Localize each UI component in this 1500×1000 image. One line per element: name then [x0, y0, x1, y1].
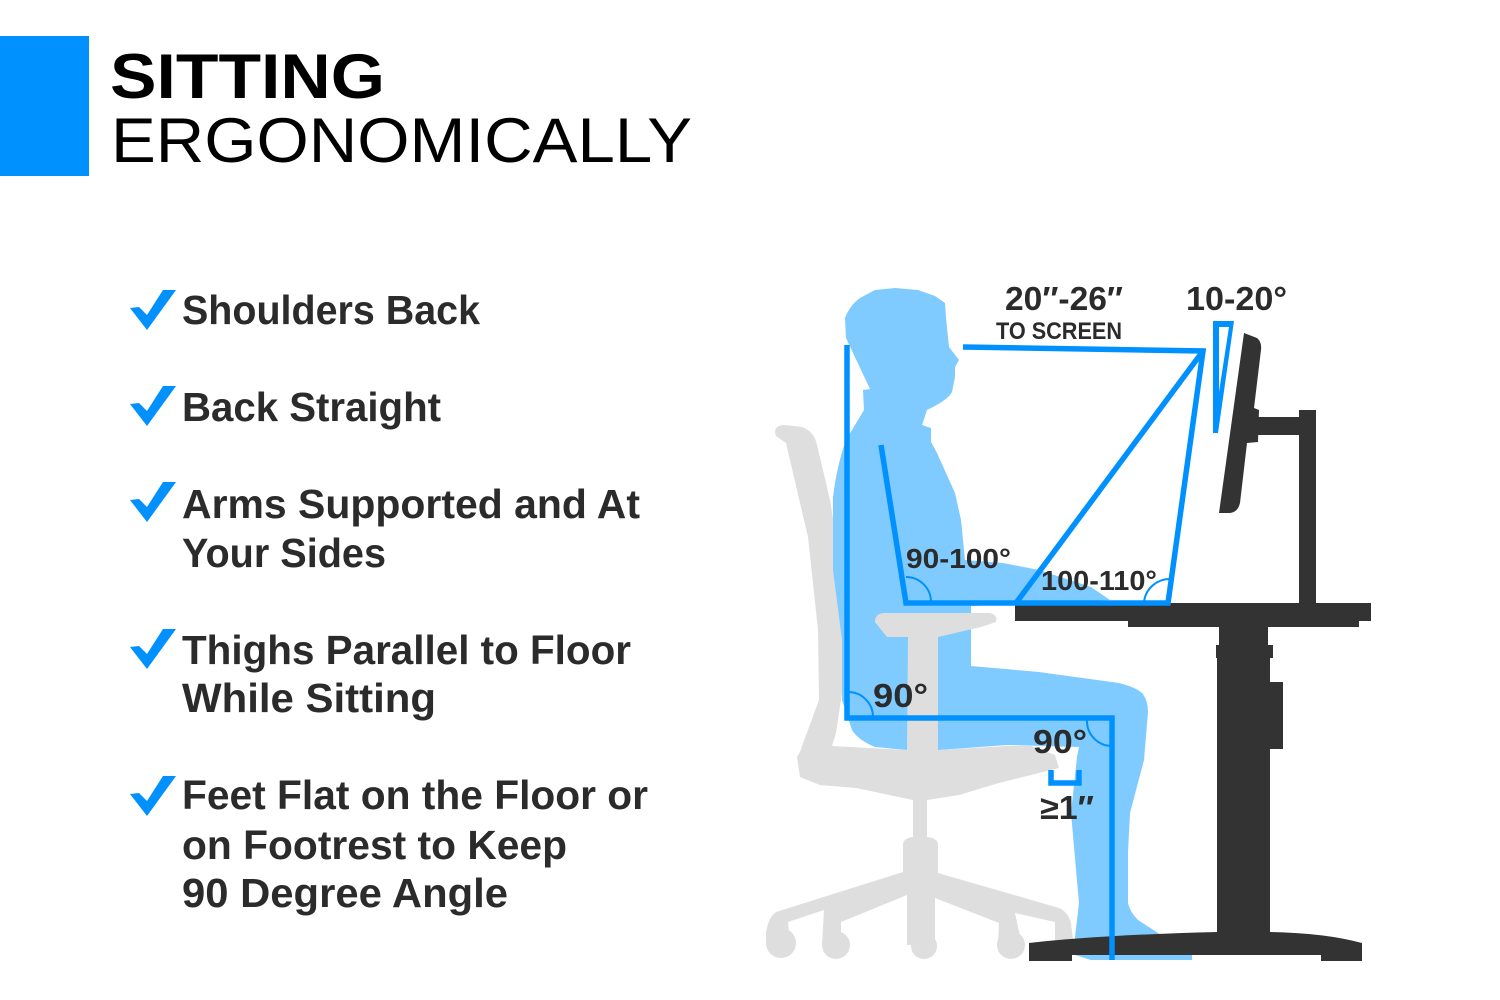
monitor arm	[1250, 410, 1316, 603]
chair back	[775, 425, 844, 760]
label: screen tilt: 10-20°	[1186, 280, 1287, 317]
chair seat and armrest	[797, 613, 1059, 800]
posture guide lines	[847, 345, 1203, 960]
item: feet flat: Feet Flat on the Floor or	[182, 772, 648, 818]
chair casters	[766, 928, 1025, 959]
person silhouette	[833, 288, 1192, 960]
chair base	[766, 798, 1073, 945]
item: arms supported: Arms Supported and At	[182, 481, 640, 527]
title	[110, 42, 692, 176]
item: feet flat: on Footrest to Keep	[182, 822, 567, 868]
item: feet flat	[130, 772, 648, 916]
title: ERGONOMICALLY	[111, 106, 692, 176]
label: viewing distance: TO SCREEN	[996, 318, 1122, 345]
item: back straight: Back Straight	[182, 384, 441, 430]
item: thighs parallel: Thighs Parallel to Floor	[182, 627, 631, 673]
header accent block	[0, 36, 89, 176]
title: SITTING	[110, 42, 385, 112]
label: seat clearance: ≥1″	[1040, 789, 1094, 826]
ergonomic diagram	[766, 280, 1371, 961]
label: viewing distance	[996, 280, 1123, 345]
label: knee angle: 90°	[1033, 723, 1087, 760]
label: viewing distance: 20″-26″	[1005, 280, 1123, 317]
item: arms supported: Your Sides	[182, 530, 386, 576]
screen tilt wedge	[1213, 321, 1234, 433]
item: thighs parallel	[130, 627, 631, 721]
monitor	[1219, 333, 1261, 513]
desk	[1015, 603, 1371, 961]
label: wrist angle: 100-110°	[1041, 565, 1157, 596]
label: elbow angle: 90-100°	[906, 543, 1011, 574]
item: thighs parallel: While Sitting	[182, 675, 436, 721]
angle arcs	[849, 577, 1171, 746]
item: feet flat: 90 Degree Angle	[182, 870, 508, 916]
checklist	[130, 287, 648, 916]
label: hip angle: 90°	[873, 677, 928, 714]
item: arms supported	[130, 481, 640, 576]
item: shoulders back: Shoulders Back	[182, 287, 480, 333]
